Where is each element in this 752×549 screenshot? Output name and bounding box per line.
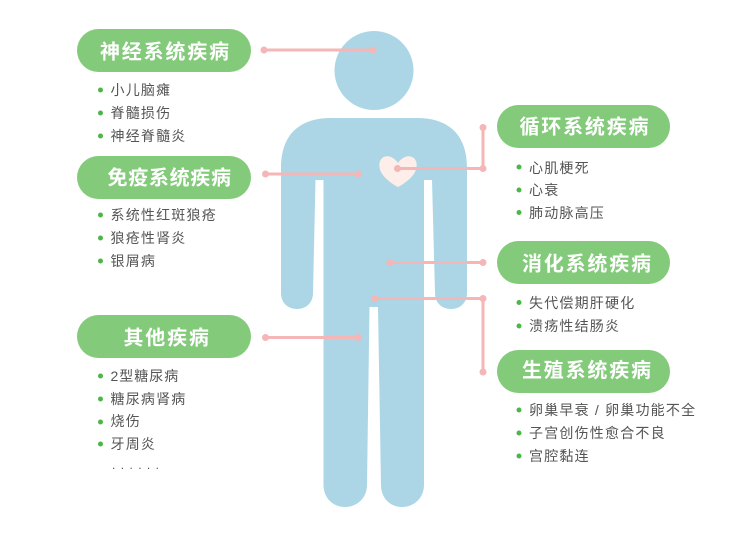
torso, arms and legs xyxy=(281,118,467,507)
heading pill: nervous system xyxy=(77,29,251,72)
list: reproductive system: 宫腔黏连 xyxy=(529,448,590,464)
icon: heart xyxy=(379,156,417,187)
list: immune system: 系统性红斑狼疮 xyxy=(110,207,217,223)
heading pill: immune system xyxy=(77,156,251,199)
list: other diseases: ...... xyxy=(112,458,164,472)
panel: reproductive system xyxy=(497,350,696,464)
list: other diseases: 牙周炎 xyxy=(110,436,156,452)
list: immune system xyxy=(98,207,217,269)
list: nervous system xyxy=(98,82,186,144)
list: circulatory system: 心衰 xyxy=(529,182,559,198)
list: immune system: 银屑病 xyxy=(110,253,156,269)
heading pill: digestive system: 消化系统疾病 xyxy=(522,252,653,276)
heading pill: reproductive system: 生殖系统疾病 xyxy=(522,358,653,382)
connector: reproductive system xyxy=(372,295,486,376)
panel: other diseases xyxy=(77,315,251,472)
connector: digestive system xyxy=(386,259,486,266)
list: reproductive system: 子宫创伤性愈合不良 xyxy=(529,425,666,441)
panel: digestive system xyxy=(497,241,670,334)
list: nervous system: 脊髓损伤 xyxy=(110,105,171,121)
connector: other diseases xyxy=(262,334,362,341)
human body figure xyxy=(281,31,467,507)
list: nervous system: 小儿脑瘫 xyxy=(110,82,171,98)
list: reproductive system: 卵巢早衰 / 卵巢功能不全 xyxy=(529,402,696,418)
panel: immune system xyxy=(77,156,251,269)
list: circulatory system xyxy=(516,160,605,221)
list: digestive system xyxy=(516,295,635,334)
list: circulatory system: 肺动脉高压 xyxy=(529,205,605,221)
heading pill: other diseases xyxy=(77,315,251,358)
list: other diseases xyxy=(98,368,186,472)
connector: immune system xyxy=(262,170,362,178)
heading pill: circulatory system: 循环系统疾病 xyxy=(520,114,650,138)
heading pill: reproductive system xyxy=(497,350,670,393)
list: other diseases: 烧伤 xyxy=(110,413,141,429)
list: nervous system: 神经脊髓炎 xyxy=(110,128,186,144)
heading pill: immune system: 免疫系统疾病 xyxy=(108,166,232,190)
connector: circulatory system xyxy=(394,124,486,172)
connector: nervous system xyxy=(260,46,376,54)
list: reproductive system xyxy=(516,402,696,464)
heading pill: nervous system: 神经系统疾病 xyxy=(100,40,231,64)
list: digestive system: 溃疡性结肠炎 xyxy=(529,318,620,334)
list: other diseases: 糖尿病肾病 xyxy=(110,391,186,407)
list: other diseases: 2型糖尿病 xyxy=(110,368,179,384)
list: digestive system: 失代偿期肝硬化 xyxy=(529,295,635,311)
heading pill: other diseases: 其他疾病 xyxy=(124,326,211,350)
panel: circulatory system xyxy=(497,105,670,221)
head xyxy=(334,31,414,110)
list: immune system: 狼疮性肾炎 xyxy=(110,230,186,246)
heading pill: digestive system xyxy=(497,241,670,284)
list: circulatory system: 心肌梗死 xyxy=(529,160,590,176)
heading pill: circulatory system xyxy=(497,105,670,148)
panel: nervous system xyxy=(77,29,251,144)
